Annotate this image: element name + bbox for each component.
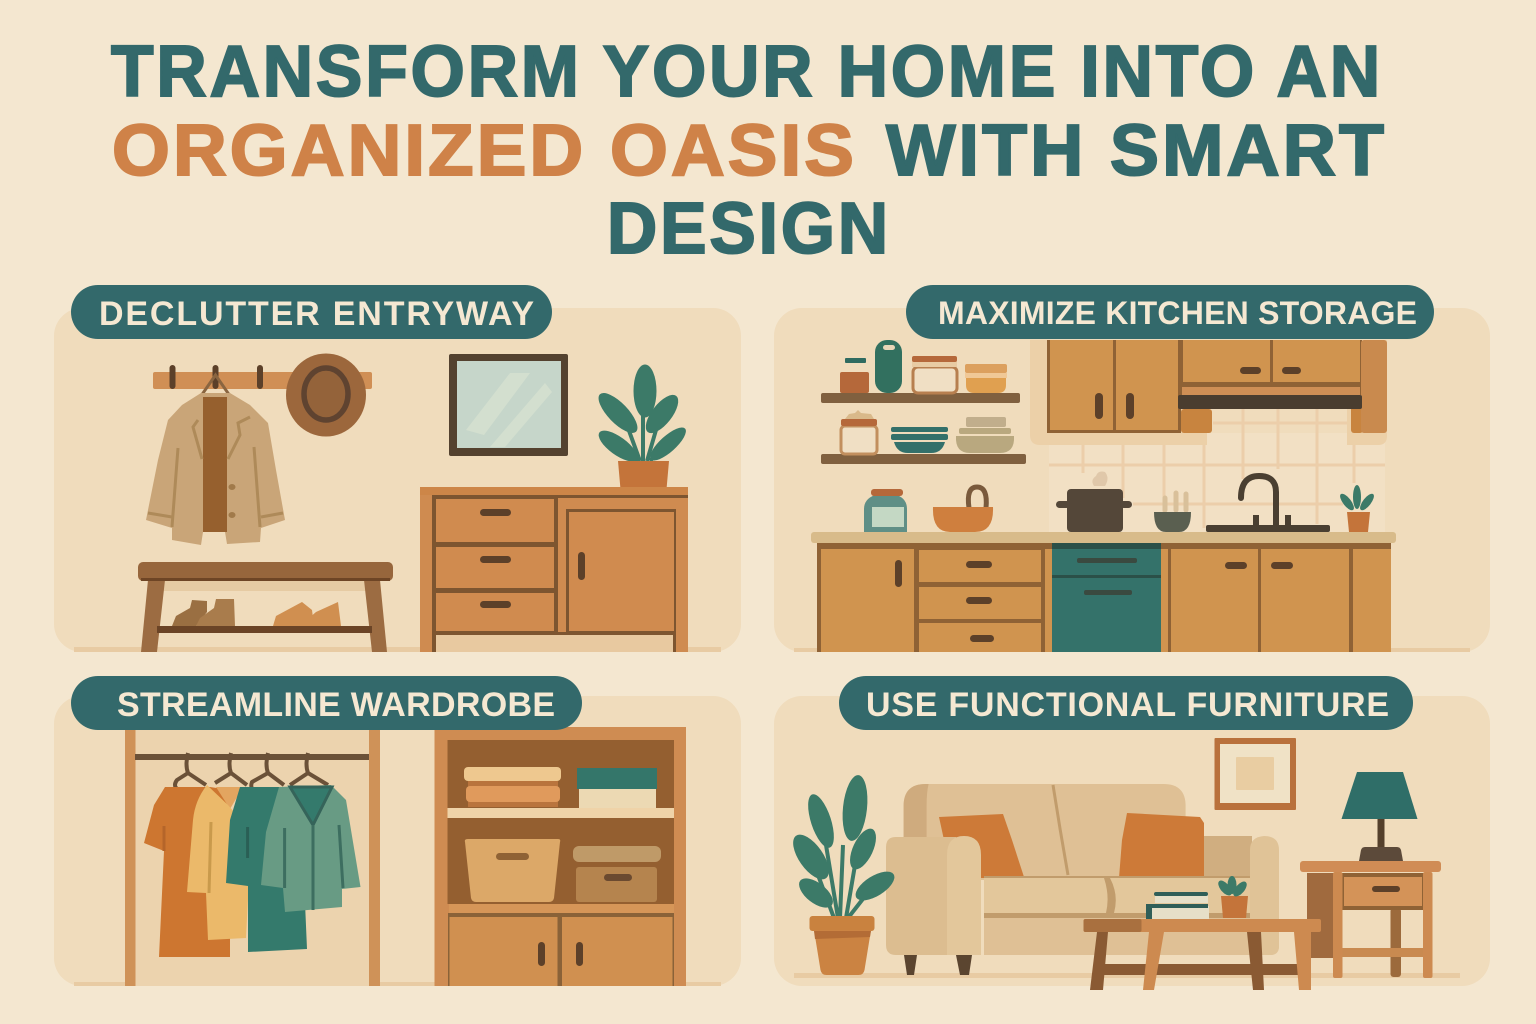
icon: coat rack <box>153 368 372 389</box>
pill label: streamline wardrobe: STREAMLINE WARDROBE <box>117 686 555 724</box>
icon: countertop <box>811 532 1396 543</box>
panel: maximize kitchen storage <box>774 308 1490 652</box>
icon: coat <box>146 375 285 545</box>
icon: coffee table with books <box>1084 876 1321 990</box>
title <box>111 32 1387 269</box>
title: ORGANIZED OASIS <box>112 111 857 191</box>
pill label: maximize kitchen storage: MAXIMIZE KITCHEN STORAGE <box>938 295 1417 331</box>
pill label: declutter entryway <box>71 285 552 339</box>
title: DESIGN <box>607 189 891 269</box>
wardrobe backing <box>135 728 369 986</box>
icon: sofa <box>886 784 1279 975</box>
icon: potted plant <box>786 774 899 975</box>
icon: sink and faucet <box>1206 476 1330 532</box>
icon: mirror <box>449 354 568 456</box>
icon: hanging clothes <box>144 753 360 957</box>
icon: framed picture <box>1214 738 1296 810</box>
panel: declutter entryway <box>54 308 741 652</box>
tile backsplash <box>1049 409 1385 532</box>
icon: dresser <box>420 487 688 652</box>
icon: hanging rail frame <box>125 728 380 986</box>
icon: side table <box>1300 861 1441 978</box>
panel: use functional furniture <box>774 696 1490 990</box>
pill label: use functional furniture <box>839 676 1413 730</box>
pill label: declutter entryway: DECLUTTER ENTRYWAY <box>99 295 534 333</box>
icon: small bowl <box>1154 493 1191 532</box>
icon: small plant <box>1338 485 1376 532</box>
icon: table lamp <box>1342 772 1418 861</box>
icon: storage shelving unit <box>434 727 686 986</box>
icon: hat <box>286 354 366 436</box>
icon: upper cabinets <box>1030 340 1387 445</box>
icon: base cabinets <box>817 543 1391 652</box>
icon: shoe bench <box>138 562 393 652</box>
pill label: maximize kitchen storage <box>906 285 1434 339</box>
pill label: streamline wardrobe <box>71 676 582 730</box>
icon: open shelves <box>821 340 1026 464</box>
title: TRANSFORM YOUR HOME INTO AN <box>111 32 1383 112</box>
icon: mixing bowl <box>933 487 993 532</box>
title: WITH SMART <box>886 111 1387 191</box>
icon: cooking pot <box>1056 472 1132 532</box>
panel: streamline wardrobe <box>54 696 741 986</box>
icon: potted plant <box>593 364 690 495</box>
icon: jar <box>864 489 907 532</box>
pill label: use functional furniture: USE FUNCTIONAL FURNITURE <box>866 686 1389 724</box>
